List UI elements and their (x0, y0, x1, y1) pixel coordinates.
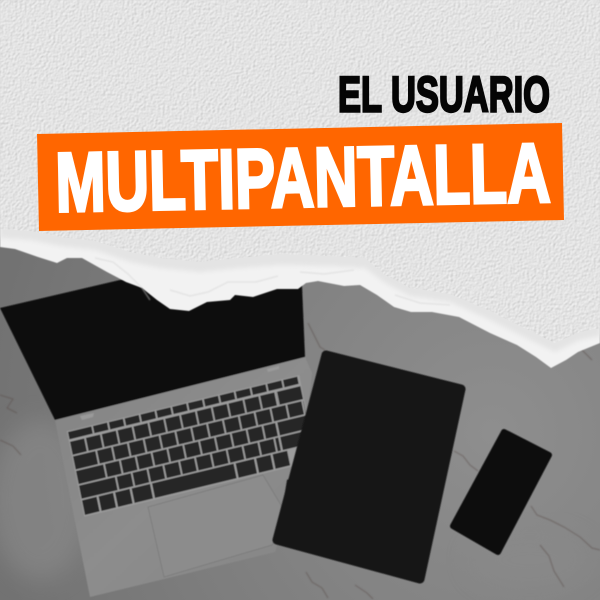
orange banner with title (37, 123, 564, 231)
tablet reflection (277, 452, 452, 579)
tablet (277, 355, 461, 579)
smartphone (453, 432, 549, 552)
textured paper sheet (0, 0, 600, 352)
banner rectangle (37, 123, 564, 231)
laptop (0, 238, 317, 597)
torn white paper edge (0, 0, 600, 368)
trackpad (148, 475, 290, 577)
keyboard (67, 375, 317, 517)
laptop hinges (80, 366, 279, 420)
laptop screen (0, 238, 305, 420)
laptop base (55, 357, 312, 597)
paper tear folds (95, 258, 450, 305)
